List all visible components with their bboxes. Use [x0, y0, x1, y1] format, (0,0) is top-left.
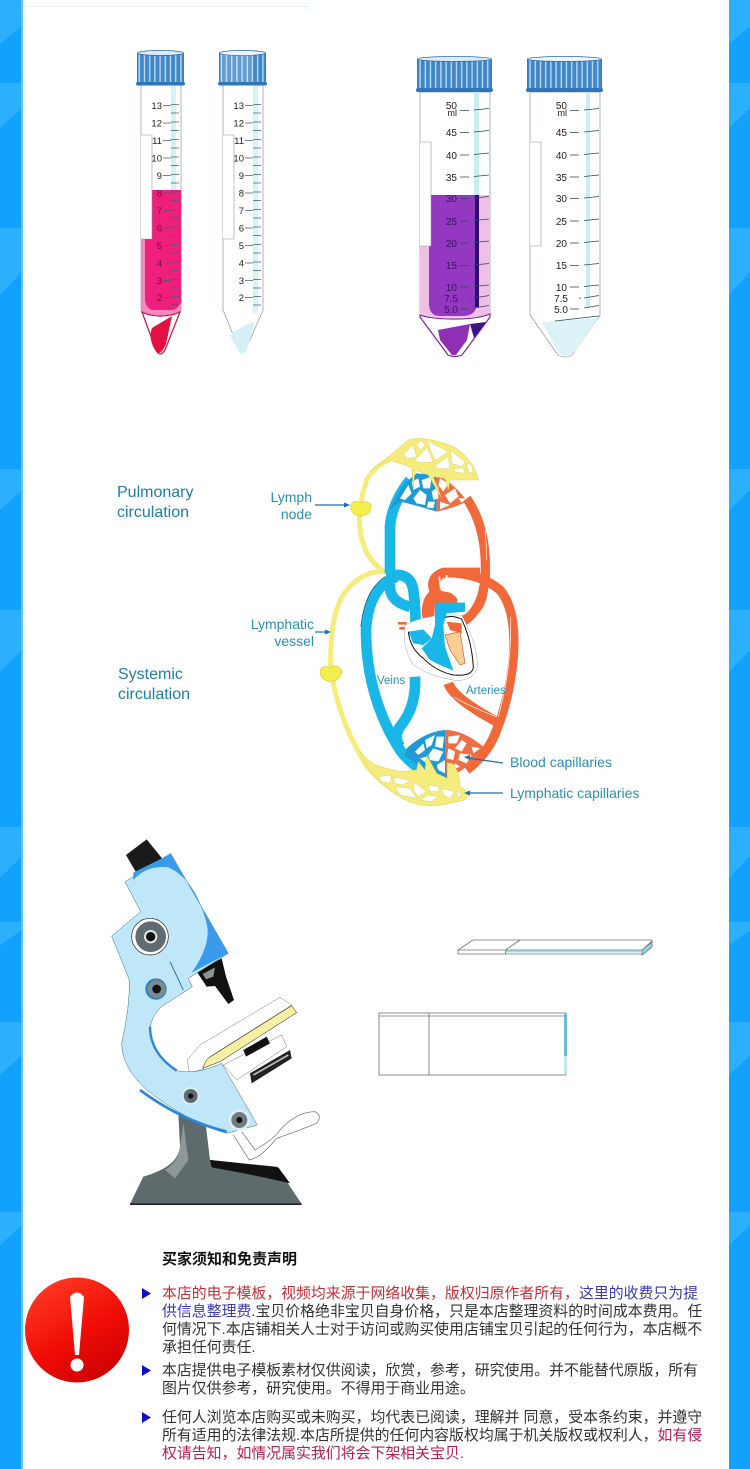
bullet icon three: [142, 1412, 151, 1423]
15 ml tube filled with pink liquid: 7: [157, 206, 162, 217]
empty 15 ml tube: [218, 50, 267, 354]
50 ml tube filled with purple liquid: 20: [446, 239, 457, 250]
heading: systemic circulation: Systemic: [118, 666, 183, 683]
50 ml tube filled with purple liquid: 45: [446, 128, 457, 139]
heading: pulmonary circulation: Pulmonary: [117, 484, 193, 501]
disclaimer paragraph one: 这里的收费只为提: [579, 1285, 698, 1302]
50 ml tube filled with purple liquid: 40: [446, 151, 457, 162]
empty 15 ml tube: 12: [233, 118, 244, 130]
50 ml tube filled with purple liquid: [416, 56, 493, 357]
empty 50 ml tube: 5.0: [554, 305, 568, 316]
empty 50 ml tube: [526, 56, 603, 357]
50 ml tube filled with purple liquid: 5.0: [444, 305, 458, 316]
stand and base: [130, 1113, 302, 1205]
empty 50 ml tube: 50: [556, 101, 567, 112]
empty 50 ml tube: 45: [556, 128, 567, 139]
50 ml tube filled with purple liquid: 35: [446, 173, 457, 184]
label: lymphatic vessel with arrow: vessel: [274, 633, 314, 649]
mirror arm: [233, 1112, 319, 1160]
15 ml tube filled with pink liquid: 8: [157, 188, 162, 200]
disclaimer paragraph one: 承担任何责任.: [162, 1339, 255, 1356]
50 ml tube filled with purple liquid: 25: [446, 217, 457, 228]
50 ml tube filled with purple liquid: ml: [448, 108, 457, 118]
glass slide, top view: [379, 1013, 567, 1075]
empty 15 ml tube: 8: [239, 188, 244, 200]
15 ml tube filled with pink liquid: 9: [157, 171, 162, 182]
bullet icon two: [142, 1365, 151, 1376]
microscope body: [112, 853, 257, 1133]
lymphatic vessels: [331, 453, 400, 793]
left blue side band: [0, 0, 23, 1469]
empty 50 ml tube: 25: [556, 217, 567, 228]
label: lymph node with arrow: Lymph: [270, 489, 312, 505]
label: arteries: Arteries: [466, 685, 506, 697]
disclaimer title: 买家须知和免责声明: [162, 1250, 297, 1268]
disclaimer paragraph three: 权请告知，如情况属实我们将会下架相关宝贝.: [162, 1445, 464, 1462]
15 ml tube filled with pink liquid: [136, 50, 185, 354]
stage: [187, 997, 297, 1073]
heading: systemic circulation: circulation: [118, 686, 190, 703]
disclaimer paragraph three: 所有适用的法律法规.本店所提供的任何内容版权均属于机关版权或权利人，: [162, 1427, 658, 1444]
objective lens: [197, 958, 234, 1004]
warning icon: red exclamation ball: [25, 1278, 129, 1382]
veins: [366, 480, 437, 777]
empty 15 ml tube: 11: [234, 136, 244, 147]
heart: [398, 560, 485, 681]
15 ml tube filled with pink liquid: 6: [157, 224, 162, 234]
disclaimer paragraph two: 图片仅供参考，研究使用。不得用于商业用途。: [162, 1380, 475, 1397]
empty 50 ml tube: 40: [556, 151, 567, 162]
empty 15 ml tube: 9: [239, 171, 244, 182]
empty 50 ml tube: 7.5: [554, 294, 568, 305]
upper lymph capillaries: [370, 438, 478, 498]
disclaimer paragraph one: 本店的电子模板，视频均来源于网络收集，版权归原作者所有，: [162, 1284, 579, 1302]
microscope: [112, 839, 319, 1205]
disclaimer paragraph one: .宝贝价格绝非宝贝自身价格，只是本店整理资料的时间成本费用。任: [251, 1303, 702, 1320]
eyepiece: [126, 839, 163, 873]
arteries: [436, 498, 514, 770]
empty 15 ml tube: 2: [239, 293, 244, 304]
15 ml tube filled with pink liquid: 12: [151, 118, 162, 130]
label: lymph node with arrow: node: [281, 506, 312, 522]
disclaimer paragraph two: 本店提供电子模板素材仅供阅读，欣赏，参考，研究使用。并不能替代原版，所有: [162, 1361, 698, 1379]
condenser: [223, 1035, 292, 1083]
50 ml tube filled with purple liquid: 15: [446, 261, 457, 272]
label: lymphatic capillaries with arrow: Lymphatic capillaries: [510, 785, 639, 801]
50 ml tube filled with purple liquid: 30: [446, 194, 457, 205]
empty 15 ml tube: 13: [233, 101, 244, 112]
empty 15 ml tube: 7: [239, 206, 244, 217]
label: blood capillaries with arrow: [464, 754, 612, 770]
15 ml tube filled with pink liquid: 2: [157, 293, 162, 304]
right blue side band: [729, 0, 750, 1469]
lymph nodes: [320, 501, 371, 682]
50 ml tube filled with purple liquid: 10: [446, 283, 457, 294]
15 ml tube filled with pink liquid: 5: [157, 241, 162, 252]
empty 15 ml tube: 4: [239, 258, 244, 270]
glass slide, side view: [458, 940, 652, 955]
disclaimer paragraph one: 何情况下.本店铺相关人士对于访问或购买使用店铺宝贝引起的任何行为，本店概不: [162, 1321, 702, 1338]
disclaimer paragraph three: 如有侵: [658, 1427, 702, 1444]
50 ml tube filled with purple liquid: 50: [446, 101, 457, 112]
label: veins: Veins: [377, 675, 405, 687]
label: lymph node with arrow: [270, 489, 350, 522]
empty 15 ml tube: 3: [239, 276, 244, 287]
15 ml tube filled with pink liquid: 11: [152, 136, 162, 147]
heading: pulmonary circulation: circulation: [117, 504, 189, 521]
disclaimer paragraph one: 供信息整理费: [162, 1303, 251, 1320]
empty 50 ml tube: 20: [556, 239, 567, 250]
bullet icon one: [142, 1288, 151, 1299]
empty 50 ml tube: 35: [556, 173, 567, 184]
label: blood capillaries with arrow: Blood capillaries: [510, 754, 612, 770]
knobs: [132, 918, 250, 1131]
circulation diagram: [320, 438, 514, 806]
50 ml tube filled with purple liquid: 7.5: [444, 294, 458, 305]
lower lymph capillaries: [360, 752, 469, 806]
lower capillary bed: [405, 730, 483, 778]
empty 15 ml tube: 6: [239, 224, 244, 234]
empty 50 ml tube: 10: [556, 283, 567, 294]
empty 15 ml tube: 10: [233, 154, 244, 164]
empty 50 ml tube: 15: [556, 261, 567, 272]
label: lymphatic vessel with arrow: Lymphatic: [251, 616, 314, 632]
15 ml tube filled with pink liquid: 10: [151, 154, 162, 164]
upper capillary bed: [390, 473, 473, 512]
empty 50 ml tube: ml: [558, 108, 567, 118]
15 ml tube filled with pink liquid: 13: [151, 101, 162, 112]
15 ml tube filled with pink liquid: 4: [157, 258, 162, 270]
empty 50 ml tube: 30: [556, 194, 567, 205]
disclaimer paragraph three: 任何人浏览本店购买或未购买，均代表已阅读，理解并 同意，受本条约束，并遵守: [162, 1408, 702, 1426]
15 ml tube filled with pink liquid: 3: [157, 276, 162, 287]
empty 15 ml tube: 5: [239, 241, 244, 252]
label: lymphatic vessel with arrow: [251, 616, 331, 649]
